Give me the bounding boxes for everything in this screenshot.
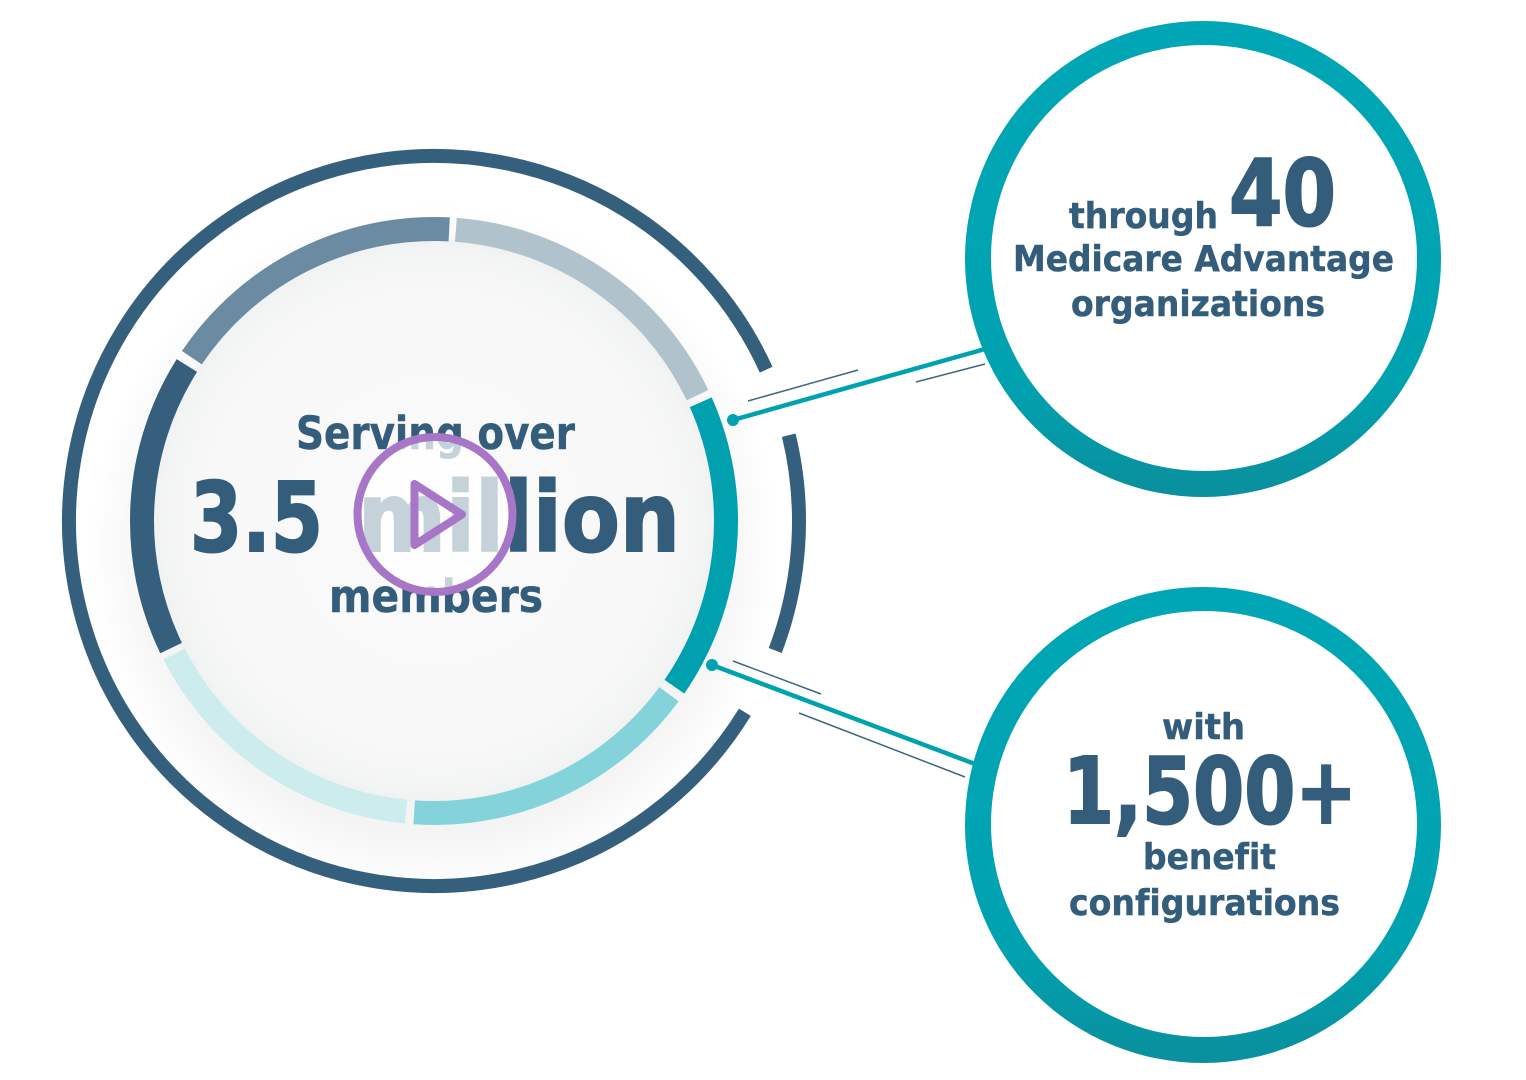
dial text: Serving over — [296, 407, 576, 460]
connector: top — [727, 349, 985, 426]
benefit text: configurations — [1069, 883, 1340, 924]
inner circle — [991, 45, 1417, 471]
dial text — [190, 407, 680, 623]
panel: organizations — [965, 21, 1441, 497]
organizations text: Medicare Advantage — [1013, 239, 1394, 280]
dial shadow — [89, 203, 779, 893]
dial text: million — [358, 462, 680, 574]
benefit text — [1063, 707, 1357, 924]
benefit text: 1,500+ — [1063, 738, 1357, 845]
inner circle — [991, 611, 1417, 1037]
panel: benefit configurations — [965, 587, 1441, 1063]
benefit text: benefit — [1143, 837, 1276, 878]
segmented ring — [26, 113, 842, 929]
panel: members dial — [0, 19, 936, 1023]
connector: bottom — [706, 659, 975, 777]
dial text: 3.5 — [190, 462, 323, 574]
outer ring — [0, 19, 936, 1023]
ring — [965, 21, 1441, 497]
organizations text: organizations — [1071, 284, 1325, 325]
inner disk — [152, 239, 716, 803]
icon: play button — [358, 437, 512, 592]
organizations text: through — [1069, 196, 1218, 237]
benefit text: with — [1162, 707, 1245, 748]
dial text: members — [329, 570, 543, 623]
organizations text — [1013, 140, 1394, 325]
ring — [965, 587, 1441, 1063]
organizations text: 40 — [1229, 140, 1336, 247]
